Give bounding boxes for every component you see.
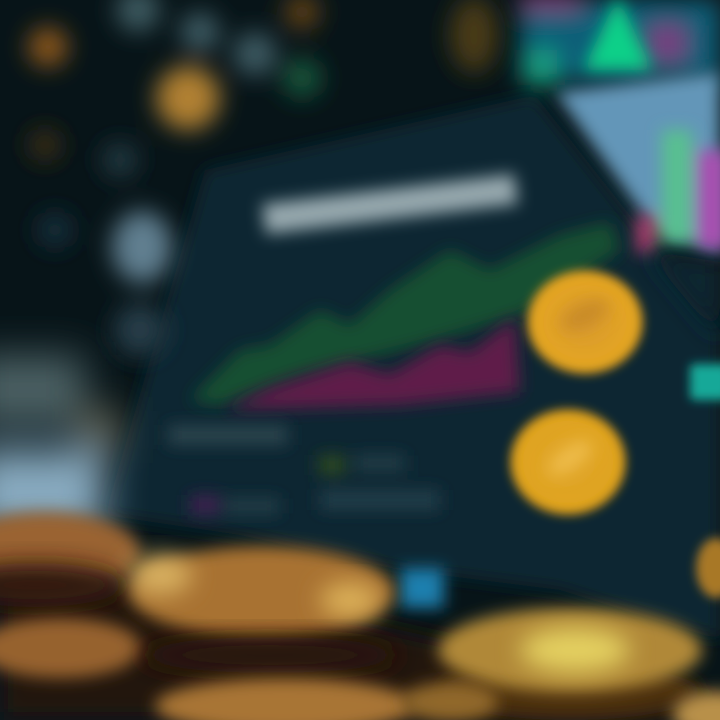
coin stack top left shadow xyxy=(0,563,125,607)
heading: blurred title bar xyxy=(262,174,518,234)
icon: olive dot xyxy=(450,0,498,73)
right coin xyxy=(438,608,702,692)
icon: amber coin xyxy=(156,66,220,130)
panel: lower left grey blocks xyxy=(0,355,120,535)
coin stack lower left xyxy=(0,618,142,678)
icon: grey dot 1 xyxy=(116,0,160,32)
coin stack: foreground xyxy=(0,512,720,720)
chart: green and pink bars xyxy=(636,130,720,253)
text block: blurred legend labels xyxy=(168,425,440,515)
panel: light blue wedge xyxy=(555,72,720,255)
bottom mid coin xyxy=(402,682,498,720)
icon: amber dot small xyxy=(284,0,320,30)
centre coin bright right xyxy=(320,582,380,618)
coin highlight xyxy=(557,294,613,336)
coin body xyxy=(527,270,643,374)
right coin highlight xyxy=(520,628,630,672)
icon: dim blue dot xyxy=(102,142,138,178)
coin: lower right xyxy=(510,409,626,515)
bottom coin xyxy=(155,678,415,720)
green area xyxy=(190,222,620,405)
coin: upper right xyxy=(527,270,643,374)
maroon area xyxy=(225,318,520,410)
panel: top right colour field xyxy=(520,0,720,85)
centre coin xyxy=(130,546,394,638)
bottom right coin xyxy=(673,691,720,720)
icon: grey dot 2 xyxy=(180,12,220,52)
coin body xyxy=(510,409,626,515)
coin: right edge xyxy=(696,538,720,598)
icon: grey dot 3 xyxy=(233,32,277,76)
dark base xyxy=(0,570,720,720)
left column blurred dots xyxy=(28,0,498,356)
icon: green dot xyxy=(282,58,322,98)
chart: green and maroon area xyxy=(190,222,620,410)
coin stack top left xyxy=(0,512,140,592)
icon: dim amber dot xyxy=(29,129,61,161)
coin highlight xyxy=(542,434,598,482)
icon: teal marker xyxy=(690,364,720,400)
centre coin bright left xyxy=(128,555,192,595)
icon: green triangle xyxy=(583,0,652,70)
icon: pale blue blob xyxy=(112,211,172,283)
panel: dark right edge xyxy=(645,250,720,340)
icon: dim blue dot 2 xyxy=(37,212,73,248)
centre coin shadow xyxy=(140,637,400,673)
right coin rim xyxy=(440,664,700,720)
icon: blue square xyxy=(400,568,444,608)
icon: amber dot top xyxy=(28,27,68,67)
icon: dim blue blob xyxy=(114,304,166,356)
panel: dark chart board xyxy=(105,95,720,640)
